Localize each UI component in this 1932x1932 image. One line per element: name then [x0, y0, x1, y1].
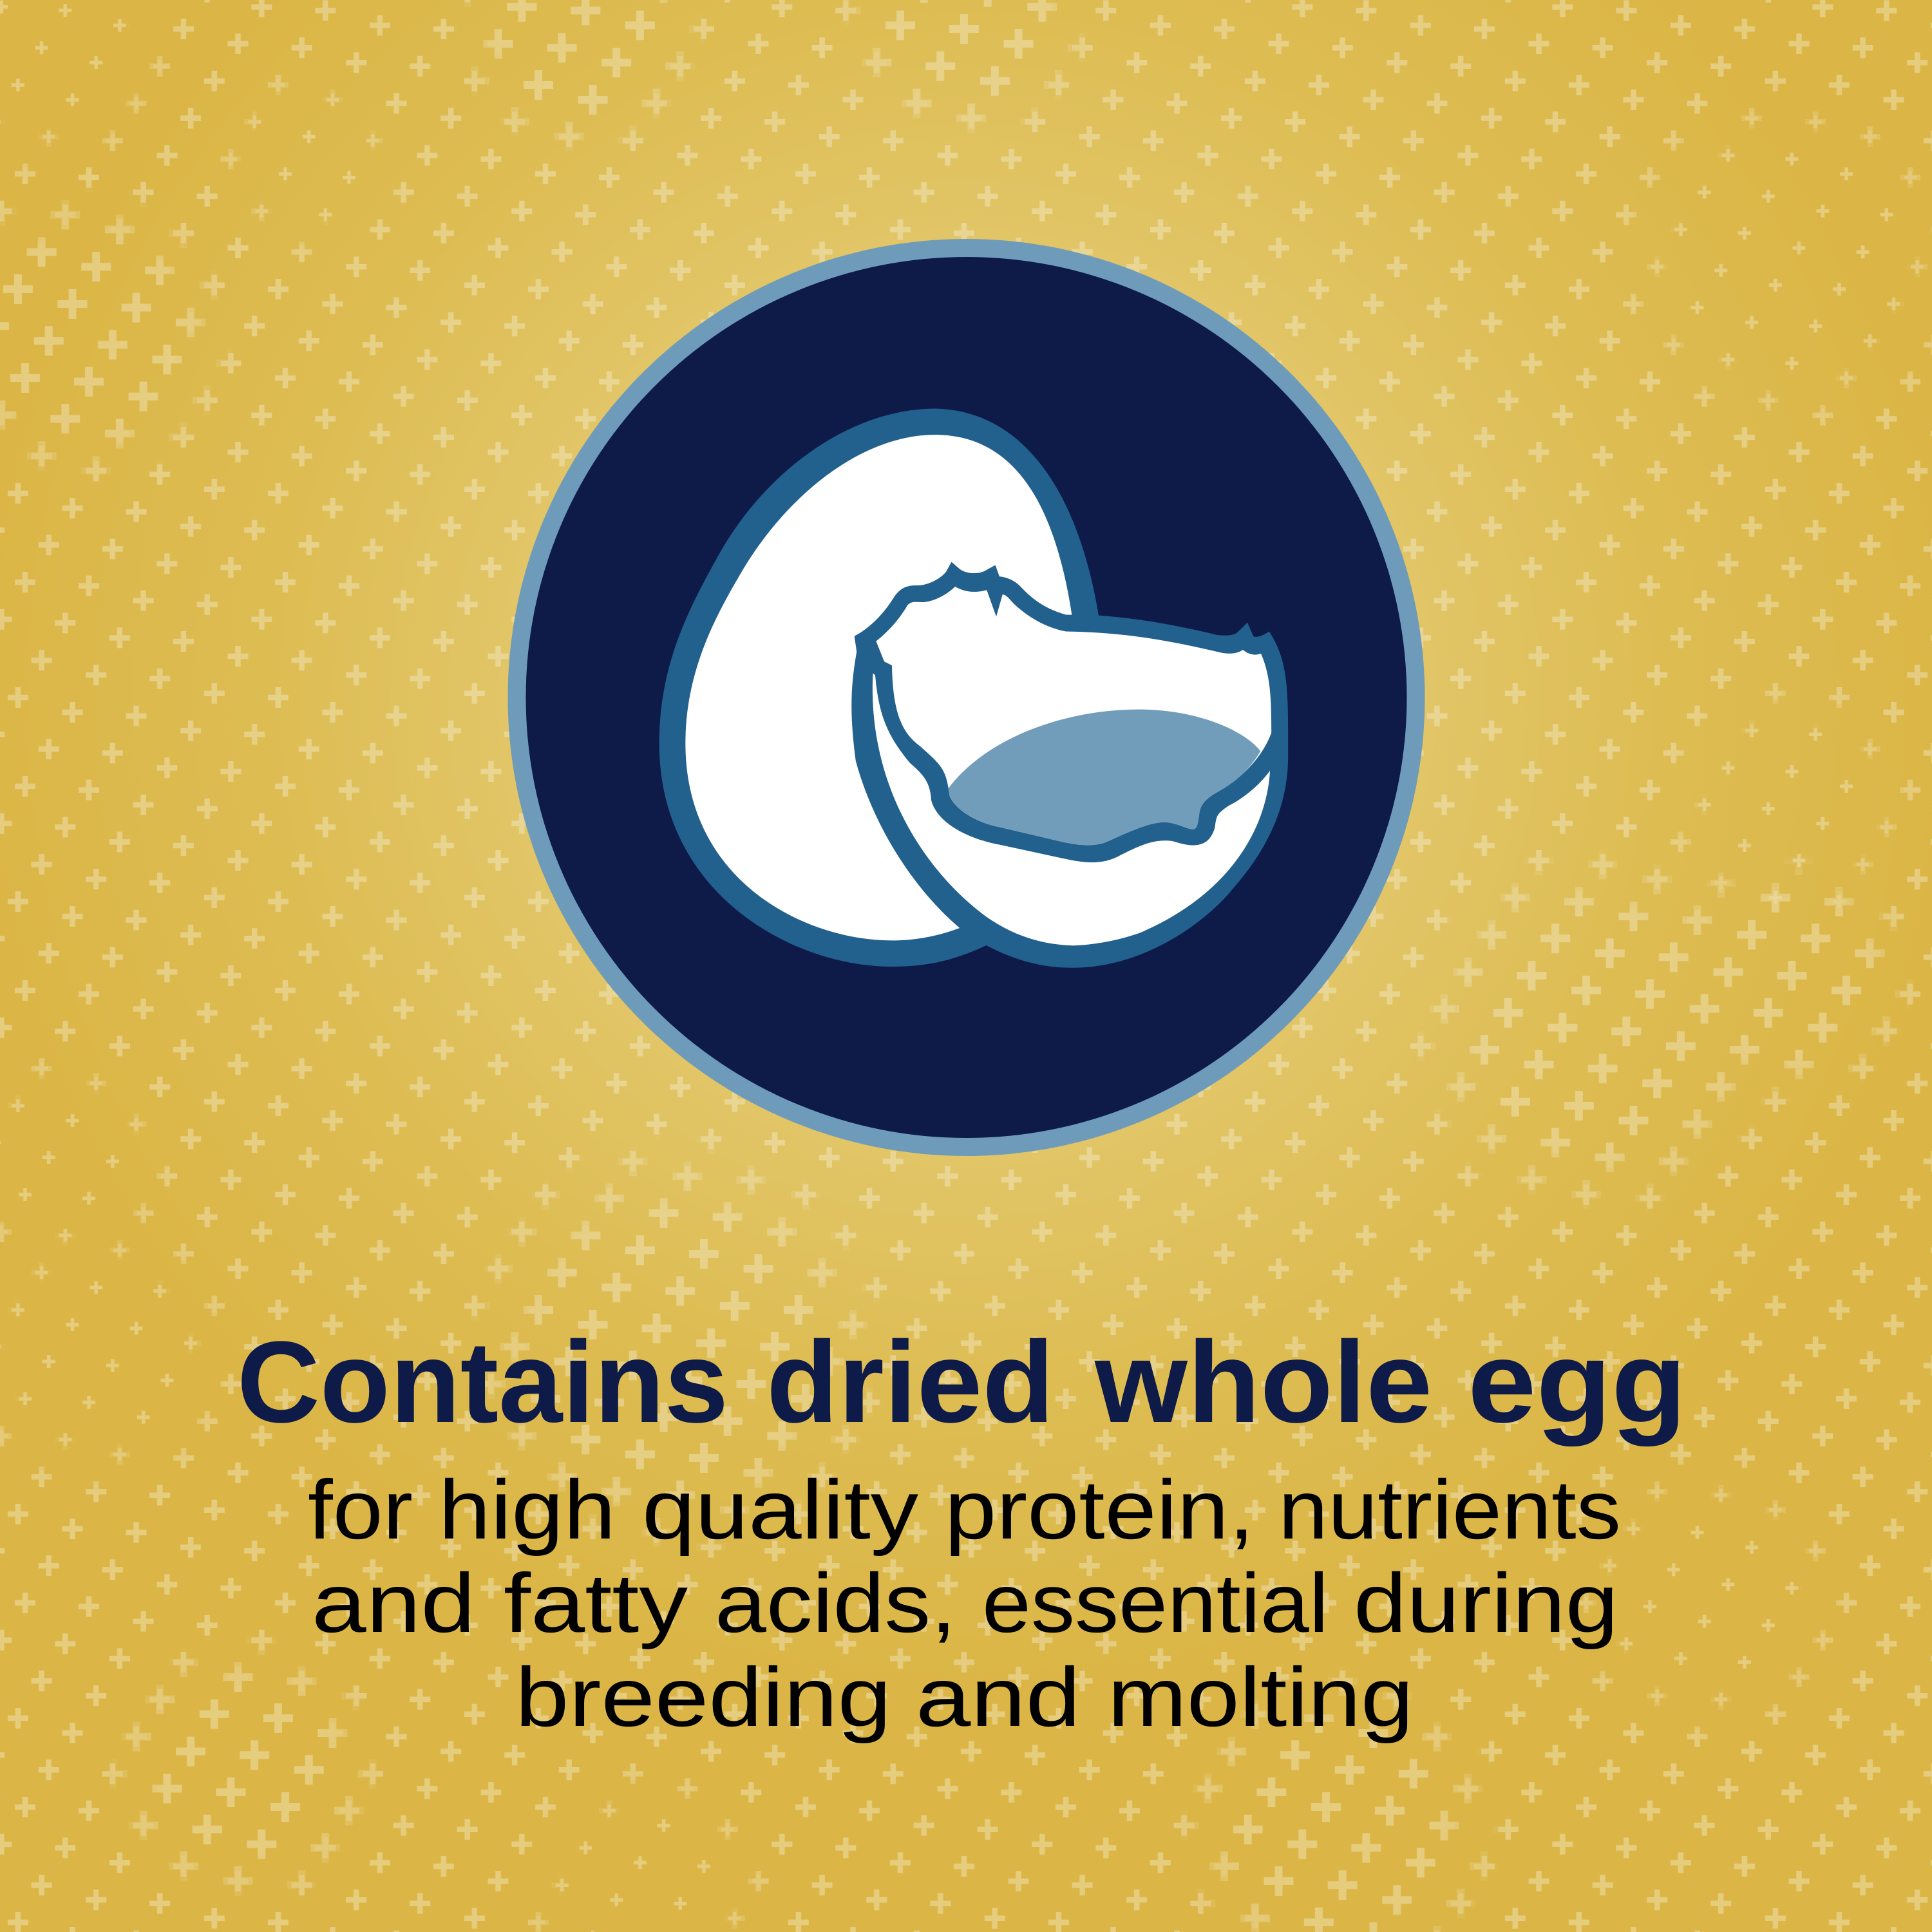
- body text: quality: [642, 1463, 918, 1557]
- body text: and: [312, 1556, 475, 1650]
- heading: Contains: [237, 1318, 728, 1447]
- heading: [237, 1318, 1687, 1447]
- body text: fatty: [504, 1556, 688, 1650]
- badge navy disc: [526, 257, 1406, 1138]
- body text: essential: [982, 1556, 1329, 1650]
- badge outer ring: [507, 239, 1425, 1156]
- body text: high: [439, 1463, 616, 1557]
- heading: whole: [1094, 1318, 1432, 1447]
- body text: protein,: [945, 1463, 1255, 1557]
- body text: breeding: [515, 1650, 891, 1744]
- body text: acids,: [715, 1556, 956, 1650]
- body text: and: [916, 1650, 1081, 1744]
- body text: nutrients: [1278, 1463, 1621, 1557]
- egg yolk pool: [949, 710, 1260, 845]
- body text: [308, 1463, 1621, 1744]
- cracked shell: [851, 562, 1288, 968]
- body text: for: [308, 1463, 413, 1557]
- icon: cracked egg badge: [507, 239, 1425, 1156]
- body text: during: [1354, 1556, 1618, 1650]
- whole egg: [659, 409, 1109, 967]
- icon: egg and cracked shell: [659, 409, 1288, 968]
- heading: dried: [766, 1318, 1054, 1447]
- body text: molting: [1108, 1650, 1414, 1744]
- heading: egg: [1468, 1318, 1687, 1447]
